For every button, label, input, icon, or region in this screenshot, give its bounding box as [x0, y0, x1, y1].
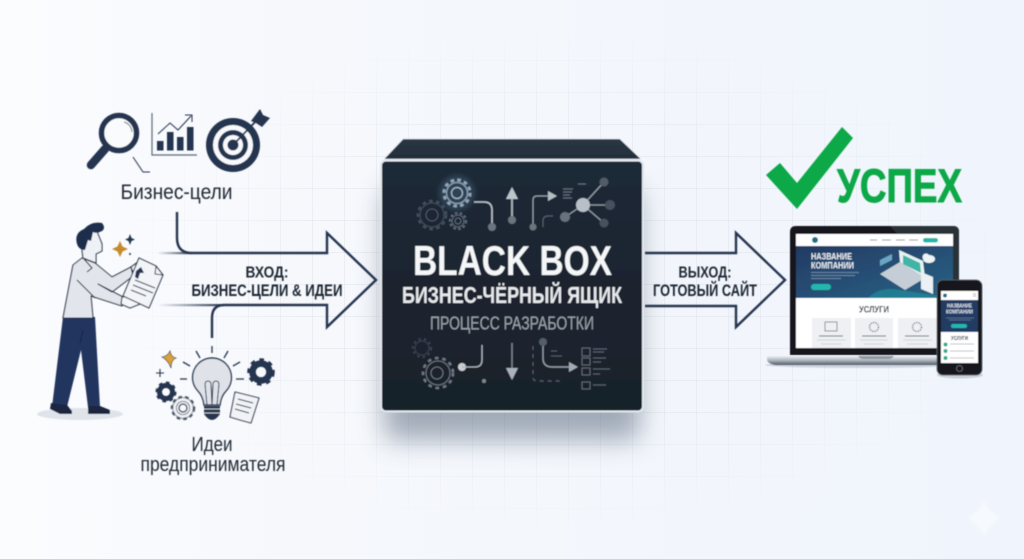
hero text: НАЗВАНИЕ	[811, 252, 852, 262]
icon: bar chart	[152, 113, 197, 155]
infographic content	[37, 109, 983, 476]
icons: idea gears and note	[156, 351, 273, 423]
person	[37, 223, 142, 420]
icon: target	[206, 109, 270, 172]
laptop base	[767, 356, 950, 365]
icon: light bulb	[180, 346, 244, 420]
hero illustration	[868, 250, 953, 298]
box bottom icons	[413, 338, 610, 389]
input label	[192, 264, 342, 300]
phone screen	[941, 291, 978, 363]
output label	[653, 264, 757, 300]
box subtitle: БИЗНЕС-ЧЁРНЫЙ ЯЩИК	[402, 281, 623, 308]
label: entrepreneur ideas: Идеи	[192, 434, 232, 456]
phone screen: НАЗВАНИЕ	[947, 304, 972, 310]
watermark sparkle	[969, 502, 999, 535]
box caption: ПРОЦЕСС РАЗРАБОТКИ	[430, 314, 594, 334]
services heading: УСЛУГИ	[859, 304, 889, 316]
icon: check mark	[766, 127, 853, 209]
input label: БИЗНЕС-ЦЕЛИ & ИДЕИ	[192, 282, 342, 300]
box top icons	[418, 175, 615, 231]
hero text	[811, 252, 854, 270]
phone screen: КОМПАНИИ	[946, 310, 973, 316]
label: entrepreneur ideas: предпринимателя	[140, 454, 286, 476]
hero text: КОМПАНИИ	[811, 260, 854, 270]
output arrow	[645, 233, 785, 327]
box title: BLACK BOX	[413, 237, 612, 284]
icon: sparkles	[112, 234, 135, 257]
background	[179, 67, 970, 492]
output label: ГОТОВЫЙ САЙТ	[653, 281, 757, 300]
input label: ВХОД:	[246, 264, 288, 282]
black box	[381, 139, 643, 412]
label: business goals: Бизнес-цели	[120, 181, 232, 204]
document	[123, 258, 163, 308]
phone screen: УСЛУГИ	[951, 336, 968, 342]
success heading: УСПЕХ	[837, 159, 962, 212]
laptop bezel	[790, 226, 959, 355]
laptop screen	[796, 234, 953, 348]
box shadow	[384, 190, 640, 440]
box top face	[384, 139, 641, 159]
laptop	[765, 226, 959, 368]
output label: ВЫХОД:	[678, 264, 732, 282]
icon: magnifier	[91, 116, 150, 172]
phone	[937, 280, 983, 378]
box front face	[381, 160, 643, 412]
input arrow	[158, 212, 376, 338]
label: entrepreneur ideas	[140, 434, 286, 476]
service cards	[812, 318, 937, 348]
